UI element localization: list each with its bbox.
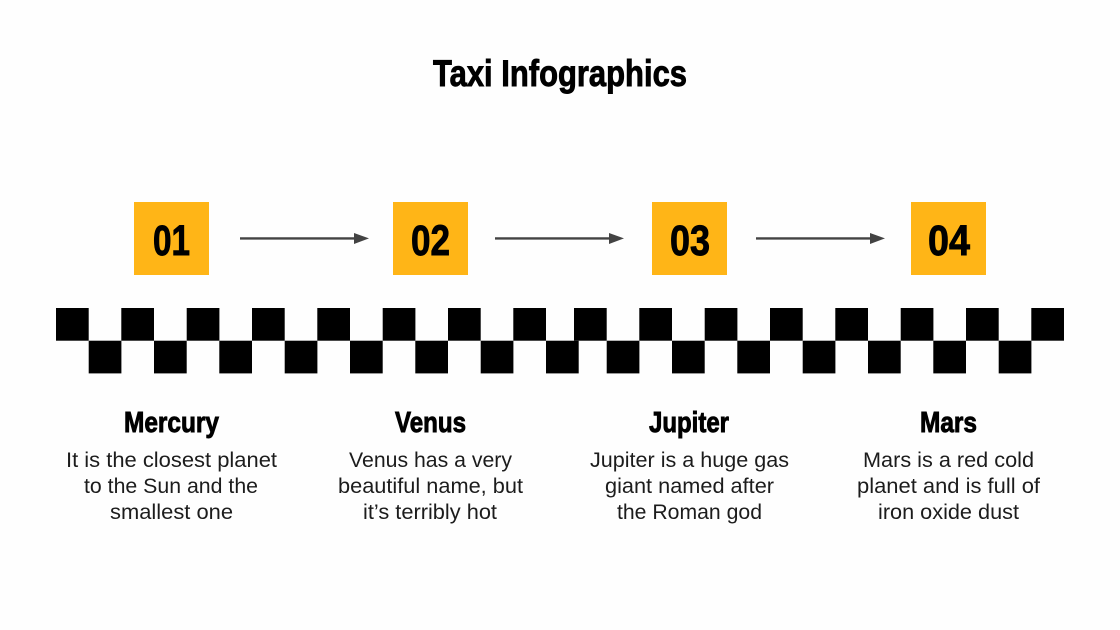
arrow: 02 to 03 — [495, 233, 624, 244]
heading: Mercury: Mercury — [124, 407, 219, 439]
step 01 badge — [134, 202, 209, 275]
step 03 badge: 03 — [670, 217, 710, 265]
heading: Mars: Mars — [920, 407, 977, 439]
text: Mars description: Mars is a red cold — [863, 449, 1034, 472]
column: Venus — [338, 407, 523, 524]
step 02 badge — [393, 202, 468, 275]
step 01 badge: 01 — [153, 217, 190, 265]
checkered taxi stripe — [56, 308, 1064, 373]
column: Jupiter — [590, 407, 789, 524]
text: Jupiter description — [590, 449, 789, 524]
text: Mars description — [857, 449, 1040, 524]
text: Venus description: beautiful name, but — [338, 475, 523, 498]
arrow: 01 to 02 — [240, 233, 369, 244]
text: Mars description: iron oxide dust — [878, 501, 1019, 524]
text: Jupiter description: giant named after — [605, 475, 774, 498]
text: Jupiter description: the Roman god — [617, 501, 762, 524]
arrow: 03 to 04 — [756, 233, 885, 244]
heading: Venus: Venus — [395, 407, 466, 439]
heading: Jupiter: Jupiter — [649, 407, 729, 439]
text: Mercury description: It is the closest planet — [66, 449, 277, 472]
text: Venus description — [338, 449, 523, 524]
title: Taxi Infographics — [433, 53, 687, 94]
step 03 badge — [652, 202, 727, 275]
text: Venus description: Venus has a very — [349, 449, 512, 472]
text: Mercury description: to the Sun and the — [84, 475, 258, 498]
text: Mercury description — [66, 449, 277, 524]
text: Jupiter description: Jupiter is a huge gas — [590, 449, 789, 472]
step 04 badge — [911, 202, 986, 275]
column: Mercury — [66, 407, 277, 524]
step 04 badge: 04 — [928, 217, 970, 265]
text: Mercury description: smallest one — [110, 501, 233, 524]
column: Mars — [857, 407, 1040, 524]
text: Mars description: planet and is full of — [857, 475, 1040, 498]
step 02 badge: 02 — [411, 217, 450, 265]
text: Venus description: it’s terribly hot — [363, 501, 497, 524]
